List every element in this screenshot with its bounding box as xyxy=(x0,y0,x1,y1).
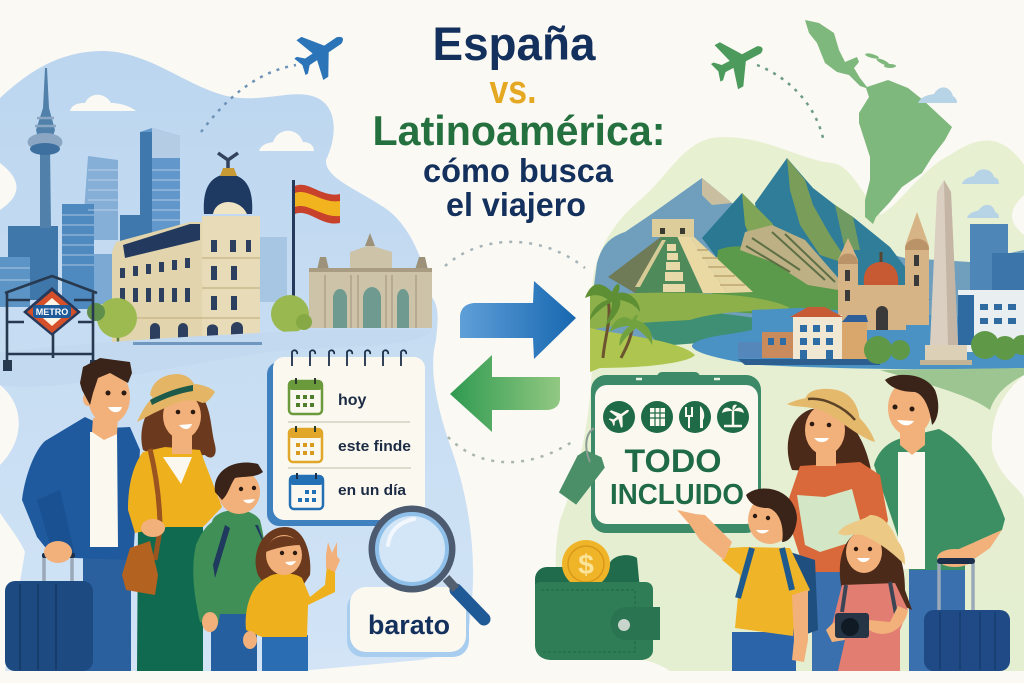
girl xyxy=(826,515,912,671)
trees xyxy=(864,331,1024,364)
flag of Spain xyxy=(292,180,340,300)
meadow xyxy=(590,293,790,330)
ground: plaza xyxy=(0,330,432,387)
search box: barato xyxy=(347,587,469,657)
father xyxy=(22,358,140,671)
cathedral xyxy=(838,212,929,330)
title: España xyxy=(432,17,596,70)
obelisk xyxy=(920,180,972,365)
Metropolis building xyxy=(112,153,260,346)
map: Latin America xyxy=(805,20,952,224)
family: Latin America travellers xyxy=(677,375,1010,671)
arrow: green to the left xyxy=(450,355,560,432)
trees xyxy=(87,295,312,345)
title: el viajero xyxy=(446,186,586,223)
dotted route: green plane xyxy=(757,65,823,138)
father hand xyxy=(44,541,72,563)
icon: blue plane xyxy=(287,18,356,87)
Torrespaña tower xyxy=(28,68,62,228)
icon: plane circle xyxy=(603,401,635,433)
Andes peaks xyxy=(730,158,930,300)
sign text: TODO xyxy=(624,443,722,479)
icon: wallet with coin: $ xyxy=(578,549,594,580)
icon: Metro sign: METRO xyxy=(36,307,68,317)
forested slope and terraced ruins xyxy=(710,225,850,322)
label: este finde: este finde xyxy=(338,438,411,455)
scene: Latin America landscape xyxy=(585,158,1024,410)
panel: Latin America backdrop blob xyxy=(556,137,1024,671)
icon: yellow calendar xyxy=(289,426,322,462)
lake xyxy=(692,308,1024,369)
father xyxy=(874,375,1005,671)
palm trees xyxy=(585,284,652,358)
label: hoy: hoy xyxy=(338,392,367,409)
icon: green plane xyxy=(704,26,774,95)
panel: Spain backdrop blob xyxy=(0,51,473,671)
city blocks xyxy=(958,224,1024,352)
Mayan pyramid xyxy=(608,219,753,293)
spiral rings xyxy=(292,350,406,366)
panel: calendar notepad xyxy=(267,350,425,526)
sign: Todo incluido xyxy=(591,372,761,533)
title: vs. xyxy=(490,68,536,112)
icon: hotel circle xyxy=(641,401,673,433)
icon: cutlery circle xyxy=(679,401,711,433)
colonial houses xyxy=(738,307,880,365)
search box: barato: barato xyxy=(368,610,450,640)
icon: wallet with coin xyxy=(535,540,660,660)
title: cómo busca xyxy=(423,152,614,189)
girl xyxy=(243,527,340,671)
title xyxy=(372,17,666,223)
icon: green calendar xyxy=(289,378,322,414)
far blue mountains xyxy=(592,178,1024,340)
dotted connector: lower xyxy=(448,437,575,462)
icon: Metro sign xyxy=(3,276,97,371)
forest xyxy=(640,311,770,346)
boy xyxy=(193,462,265,671)
icon: magnifying glass xyxy=(372,509,484,619)
mother xyxy=(122,374,222,671)
clouds: Spain sky xyxy=(70,95,314,151)
suitcase xyxy=(924,549,1010,671)
family: Spain travellers xyxy=(5,358,340,671)
boy xyxy=(677,489,818,671)
mother xyxy=(785,389,888,671)
title: Latinoamérica: xyxy=(372,107,666,154)
icon: blue calendar xyxy=(290,473,323,509)
scene: Madrid skyline xyxy=(0,68,432,346)
Puerta de Alcalá xyxy=(309,233,432,328)
dotted connector: upper xyxy=(445,242,585,268)
arrow: blue to the right xyxy=(460,281,576,359)
skyscrapers xyxy=(0,128,287,309)
suitcase xyxy=(5,553,93,671)
dotted route: blue plane xyxy=(201,65,296,132)
icon: luggage tag xyxy=(558,428,606,506)
label: en un día: en un día xyxy=(338,482,407,499)
icon: palm circle xyxy=(717,401,749,433)
clouds: Latin America sky xyxy=(918,87,999,218)
sign: Todo incluido: INCLUIDO xyxy=(610,479,744,511)
